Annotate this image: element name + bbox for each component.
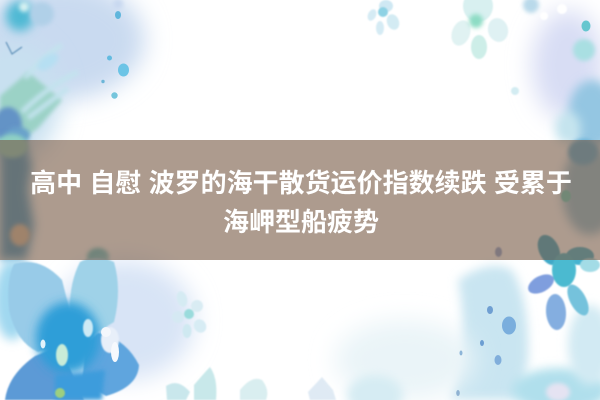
small flower: top centre [366, 0, 401, 35]
wash, flower and drops: top right [511, 0, 600, 150]
title: 海岬型船疲势 [223, 207, 379, 237]
blue flower: right [525, 253, 600, 331]
bands of colour behind title: right [495, 139, 600, 269]
wash and brush strokes: top left [0, 0, 145, 160]
water drops: top left [101, 0, 129, 99]
title band [0, 140, 600, 260]
bands of colour behind title: left [0, 134, 109, 266]
wash: bottom right [335, 266, 600, 400]
small flower: bottom centre left [172, 290, 209, 338]
pale flowers: bottom centre [166, 367, 336, 400]
large blue flower: bottom left [0, 258, 139, 400]
large pale green flower: top [448, 0, 511, 59]
title: 高中 自慰 波罗的海干散货运价指数续跌 受累于 [30, 168, 572, 198]
water drops: bottom right [456, 306, 516, 396]
wash: bottom left [55, 260, 195, 380]
title [30, 168, 572, 237]
